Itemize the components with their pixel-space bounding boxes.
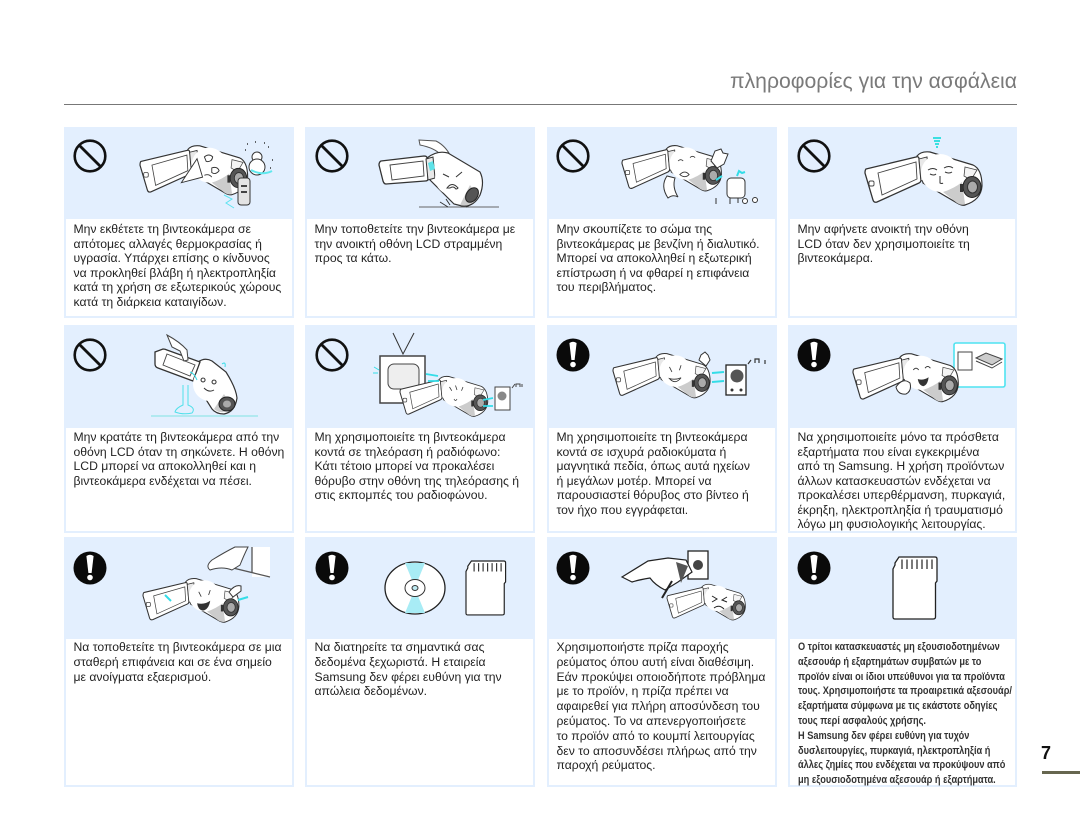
text block: εξαρτήματα που είναι εγκεκριμένα (798, 445, 979, 459)
text block: Να διατηρείτε τα σημαντικά σας (314, 640, 484, 654)
text block (790, 428, 1015, 531)
text block: απότομες αλλαγές θερμοκρασίας ή (74, 237, 262, 251)
text block: Μην σκουπίζετε το σώμα της (556, 222, 712, 236)
text block: το προϊόν από το κουμπί λειτουργίας (556, 729, 755, 743)
text block: με το προϊόν, η πρίζα πρέπει να (556, 684, 729, 698)
icon: mandatory (556, 552, 590, 584)
illustration: camcorder between TV and speaker (373, 332, 522, 417)
text block: Η Samsung δεν φέρει ευθύνη για τυχόν (798, 730, 969, 742)
text block: θόρυβο στην οθόνη της τηλεόρασης ή (314, 474, 519, 488)
text block: απώλεια δεδομένων. (314, 684, 427, 698)
panel: temperature and humidity (64, 127, 294, 318)
panel: data backup (305, 537, 535, 787)
icon: mandatory (798, 338, 830, 372)
page marker bar (1042, 771, 1080, 774)
text block: Samsung δεν φέρει ευθύνη για την (314, 670, 502, 684)
text block: άλλων κατασκευαστών ενδέχεται να (798, 474, 991, 488)
text block: Μην αφήνετε ανοικτή την οθόνη (798, 222, 969, 236)
text block: εξαρτήματα σύμφωνα με τις εκάστοτε οδηγίες (798, 700, 997, 712)
text block: Μπορεί να αποκολληθεί η εξωτερική (556, 251, 752, 265)
text block (307, 639, 533, 785)
text block (549, 219, 775, 316)
illustration: camcorder with solvent bottle (621, 145, 758, 204)
text block (66, 219, 292, 316)
panel: holding by LCD (64, 325, 294, 533)
text block: Να χρησιμοποιείτε μόνο τα πρόσθετα (798, 430, 999, 444)
text block: με ανοίγματα εξαερισμού. (74, 670, 211, 684)
panel: ventilation (64, 537, 294, 787)
text block: τους. Χρησιμοποιήστε τα προαιρετικά αξεσουάρ/ (798, 685, 1012, 697)
text block: Μην τοποθετείτε την βιντεοκάμερα με (314, 222, 515, 236)
text block: Μη χρησιμοποιείτε τη βιντεοκάμερα (556, 430, 748, 444)
text block: άλλες ζημίες που ενδέχεται να προκύψουν από (798, 759, 1005, 771)
text block: μη εξουσιοδοτημένα αξεσουάρ ή εξαρτήματα. (798, 774, 996, 786)
text block: Κάτι τέτοιο μπορεί να προκαλέσει (314, 459, 494, 473)
text block: LCD όταν δεν χρησιμοποιείτε τη (798, 237, 970, 251)
text block: λόγω μη φυσιολογικής λειτουργίας. (798, 517, 986, 531)
text block (790, 219, 1015, 316)
text block (307, 219, 533, 316)
illustration: unplugging camcorder (620, 550, 746, 620)
text block: οθόνη LCD όταν τη σηκώνετε. Η οθόνη (74, 445, 284, 459)
text block: υγρασία. Υπάρχει επίσης ο κίνδυνος (74, 251, 270, 265)
icon: prohibited (797, 139, 831, 173)
panel: radio waves (547, 325, 777, 533)
panel: near TV or radio (305, 325, 535, 533)
illustration: camcorder with snowman (139, 141, 273, 208)
text block: LCD μπορεί να αποκολληθεί και η (74, 459, 256, 473)
panel: cleaning (547, 127, 777, 318)
icon: prohibited (315, 338, 349, 372)
text block: Μη χρησιμοποιείτε τη βιντεοκάμερα (314, 430, 506, 444)
text block: ή μεγάλων μοτέρ. Μπορεί να (556, 474, 712, 488)
text block: Χρησιμοποιήστε πρίζα παροχής (556, 640, 729, 654)
text block: αξεσουάρ ή εξαρτημάτων συμβατών με το (798, 656, 981, 668)
text block: δεν το αποσυνδέσει πλήρως από την (556, 744, 757, 758)
text block: του περιβλήματος. (556, 280, 656, 294)
icon: mandatory (74, 552, 106, 584)
icon: prohibited (556, 139, 590, 173)
text block: την ανοικτή οθόνη LCD στραμμένη (314, 237, 502, 251)
text block (549, 428, 775, 531)
icon: mandatory (316, 552, 348, 584)
text block: Μην κρατάτε τη βιντεοκάμερα από την (74, 430, 279, 444)
icon: mandatory (798, 552, 830, 584)
text block: στις εκπομπές του ραδιοφώνου. (314, 488, 488, 502)
text block: δυσλειτουργίες, πυρκαγιά, ηλεκτροπληξία ή (798, 745, 990, 757)
text block (549, 639, 775, 785)
text block: να προκληθεί βλάβη ή ηλεκτροπληξία (74, 266, 276, 280)
text block: Εάν προκύψει οποιοδήποτε πρόβλημα (556, 670, 765, 684)
text block: δεδομένα ξεχωριστά. Η εταιρεία (314, 655, 486, 669)
text block: επίστρωση ή να φθαρεί η επιφάνεια (556, 266, 749, 280)
text block: κοντά σε ισχυρά ραδιοκύματα ή (556, 445, 726, 459)
text block: παρουσιαστεί θόρυβος στο βίντεο ή (556, 488, 749, 502)
text block (307, 428, 533, 531)
text block: παροχή ρεύματος. (556, 758, 656, 772)
text block: τους περί ασφαλούς χρήσης. (798, 715, 926, 727)
title: πληροφορίες για την ασφάλεια (730, 70, 1017, 93)
text block: Μην εκθέτετε τη βιντεοκάμερα σε (74, 222, 251, 236)
text block: προς τα κάτω. (314, 251, 392, 265)
text block: κατά τη διάρκεια καταιγίδων. (74, 295, 227, 309)
text block (66, 428, 292, 531)
panel: LCD facing down (305, 127, 535, 318)
illustration: memory card (892, 556, 938, 620)
panel: third-party accessories (788, 537, 1017, 787)
illustration: camcorder near window (142, 546, 270, 623)
text block: κοντά σε τηλεόραση ή ραδιόφωνο: (314, 445, 500, 459)
text block: τον ήχο που εγγράφεται. (556, 503, 688, 517)
icon: mandatory (556, 338, 590, 372)
text block: από τη Samsung. Η χρήση προϊόντων (798, 459, 1004, 473)
text block: έκρηξη, ηλεκτροπληξία ή τραυματισμό (798, 503, 1003, 517)
text block: μαγνητικά πεδία, όπως αυτά ηχείων (556, 459, 750, 473)
text block: βιντεοκάμερα. (798, 251, 873, 265)
illustration: camcorder and speaker (612, 351, 766, 398)
text block: ρεύματος όπου αυτή είναι διαθέσιμη. (556, 655, 754, 669)
text block (66, 639, 292, 785)
text block (790, 639, 1015, 785)
panel: power outlet (547, 537, 777, 787)
text block: σταθερή επιφάνεια και σε ένα σημείο (74, 655, 272, 669)
text block: προκαλέσει υπερθέρμανση, πυρκαγιά, (798, 488, 1005, 502)
panel: LCD left open (788, 127, 1017, 318)
illustration: tired camcorder (864, 137, 983, 206)
text block: Ο τρίτοι κατασκευαστές μη εξουσιοδοτημένων (798, 641, 1000, 653)
text block: ρεύματος. Το να απενεργοποιήσετε (556, 714, 746, 728)
text block: βιντεοκάμερας με βενζίνη ή διαλυτικό. (556, 237, 760, 251)
illustration: camcorder held by screen (151, 334, 258, 416)
illustration: camcorder with accessories (852, 342, 1006, 402)
text block: κατά τη χρήση σε εξωτερικούς χώρους (74, 280, 281, 294)
icon: prohibited (73, 338, 107, 372)
panel: approved accessories (788, 325, 1017, 533)
illustration: disc and memory card (384, 560, 506, 616)
icon: prohibited (315, 139, 349, 173)
page number: 7 (1041, 743, 1051, 763)
icon: prohibited (73, 139, 107, 173)
text block: αφαιρεθεί για πλήρη αποσύνδεση του (556, 699, 760, 713)
text block: Να τοποθετείτε τη βιντεοκάμερα σε μια (74, 640, 282, 654)
illustration: camcorder placed face down (378, 140, 499, 208)
text block: προϊόν είναι οι ίδιοι υπεύθυνοι για τα προϊόντα (798, 671, 1005, 683)
text block: βιντεοκάμερα ενδέχεται να πέσει. (74, 474, 252, 488)
